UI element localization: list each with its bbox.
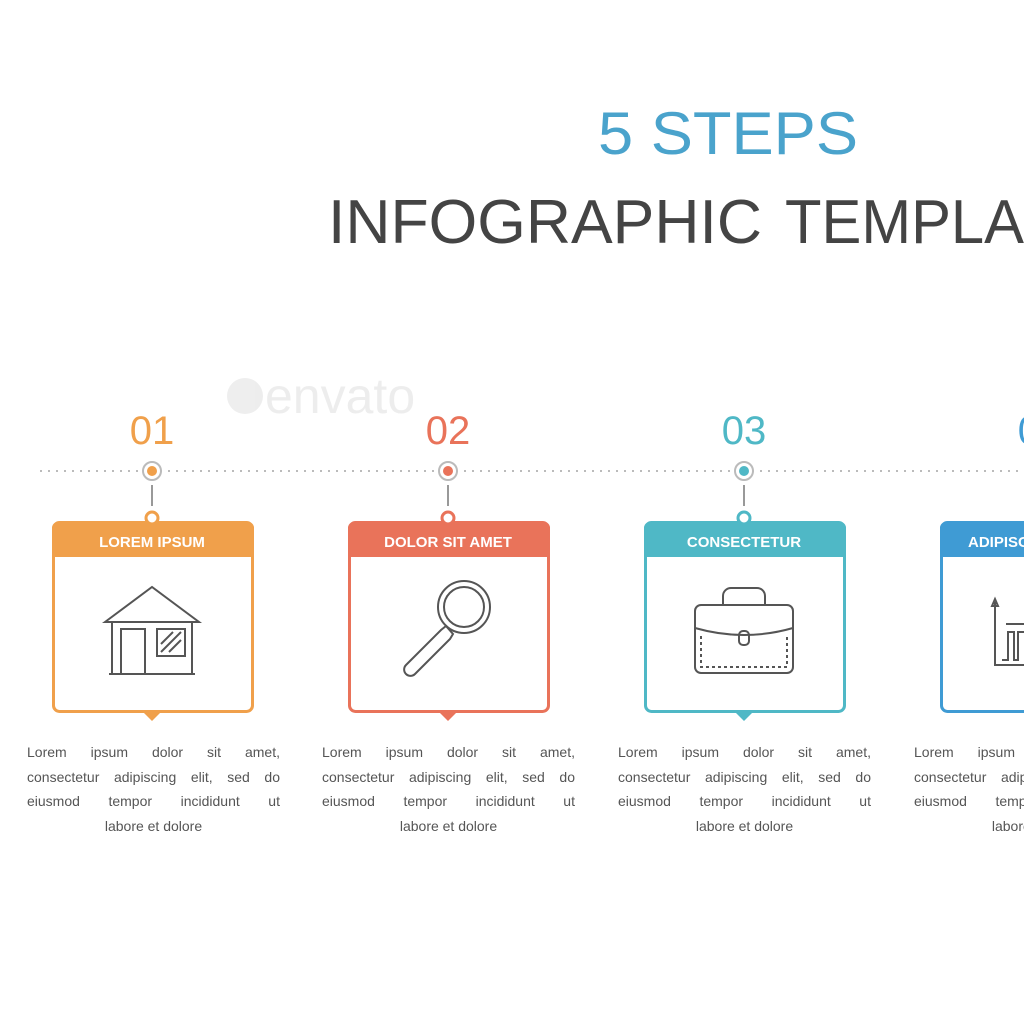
text: step 2 description: [322, 744, 575, 834]
timeline marker: [439, 462, 457, 506]
timeline marker: [143, 462, 161, 506]
card frame: CONSECTETUR: [687, 534, 801, 551]
text: step 1 description: [27, 744, 280, 834]
icon: house: [105, 587, 199, 674]
text: step 4 description: [914, 744, 1024, 834]
watermark: envato: [265, 368, 415, 424]
card frame: DOLOR SIT AMET: [384, 534, 512, 551]
text: step 2 description: Lorem ipsum dolor sit amet,: [322, 744, 575, 760]
number 01: 01: [130, 409, 174, 453]
title: infographic: INFOGRAPHIC: [328, 188, 762, 257]
step 2: [348, 409, 550, 721]
step 4: [940, 409, 1024, 712]
number 02: 02: [426, 409, 470, 453]
step 1: [52, 409, 254, 721]
text: step 3 description: labore et dolore: [696, 818, 793, 834]
text: step 3 description: eiusmod tempor incididunt ut: [618, 793, 871, 809]
text: step 1 description: eiusmod tempor incididunt ut: [27, 793, 280, 809]
text: step 2 description: labore et dolore: [400, 818, 497, 834]
icon: briefcase: [695, 588, 793, 673]
text: step 3 description: [618, 744, 871, 834]
icon: chart: [992, 599, 1024, 665]
step 3: [644, 409, 846, 721]
text: step 3 description: consectetur adipiscing elit, sed do: [618, 768, 871, 784]
card frame: [940, 522, 1024, 712]
timeline marker: [735, 462, 753, 506]
text: step 3 description: Lorem ipsum dolor sit amet,: [618, 744, 871, 760]
icon: magnifier: [404, 581, 490, 676]
card frame: [644, 512, 846, 721]
card frame: LOREM IPSUM: [99, 534, 205, 551]
text: step 1 description: labore et dolore: [105, 818, 202, 834]
text: step 2 description: consectetur adipiscing elit, sed do: [322, 768, 575, 784]
number 03: 03: [722, 409, 766, 453]
card frame: [348, 512, 550, 721]
text: step 2 description: eiusmod tempor incididunt ut: [322, 793, 575, 809]
title: 5 steps: 5 STEPS: [598, 100, 858, 167]
card frame: [52, 512, 254, 721]
timeline dotted line: [40, 470, 1024, 472]
text: step 1 description: consectetur adipiscing elit, sed do: [27, 768, 280, 784]
text: step 1 description: Lorem ipsum dolor sit amet,: [27, 744, 280, 760]
